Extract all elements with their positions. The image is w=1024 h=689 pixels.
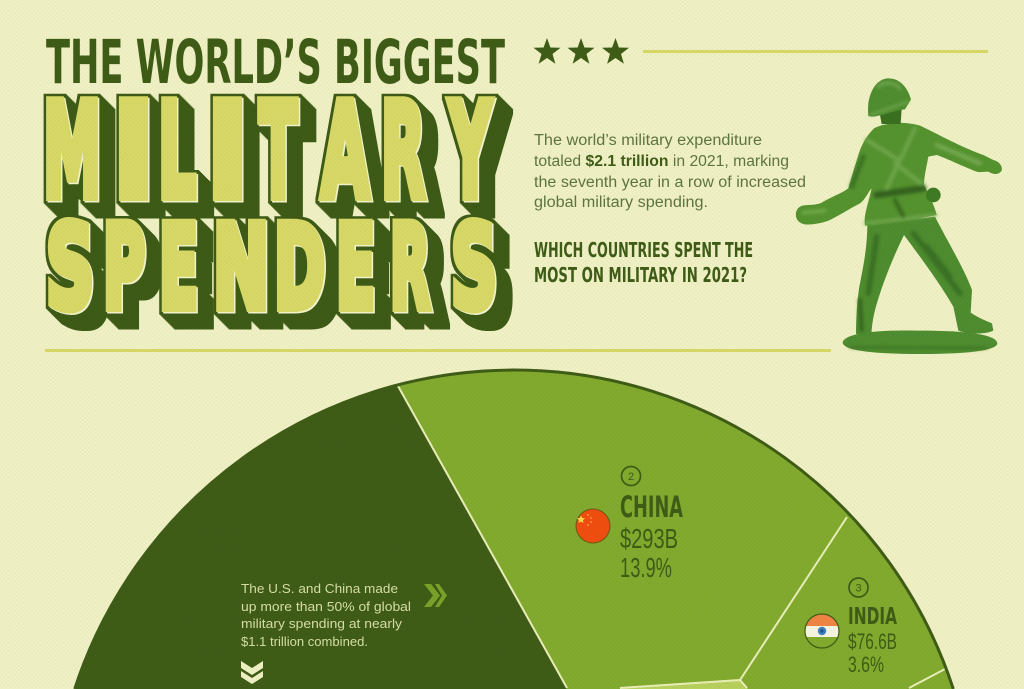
india share: 3.6% [848,652,884,677]
intro text block: the seventh year in a row of increased [534,174,806,191]
soldier legs [856,217,993,335]
callout text: The U.S. and China made [241,581,398,596]
question heading: WHICH COUNTRIES SPENT THE [534,238,753,262]
arrow: chevrons down [241,661,263,684]
soldier shading [803,83,987,348]
intro text block: global military spending. [534,194,708,211]
title word: spenders: D [274,201,325,334]
rank badge: 2: 2 [628,471,634,483]
intro text block [534,132,806,211]
callout text: $1.1 trillion combined. [241,634,368,649]
callout text: up more than 50% of global [241,599,411,614]
title word: spenders: P [103,201,145,334]
title: the world's biggest: THE WORLD’S BIGGEST [46,27,505,98]
title word: spenders: E [159,201,198,334]
soldier neck [880,108,902,124]
china name: CHINA [620,490,683,524]
pie chart [60,370,953,689]
title word: spenders: N [213,201,269,334]
slice: remaining countries [75,370,953,689]
intro text block: The world’s military expenditure [534,132,762,149]
soldier base [843,330,997,354]
title: military spenders [43,75,497,334]
india spending: $76.6B [848,629,897,654]
soldier torso and arms [796,123,1002,226]
title word: military: A [321,75,369,227]
rank badge: 3: 3 [855,582,862,594]
title word: spenders: S [46,201,94,334]
china spending: $293B [620,523,678,554]
china label [620,466,683,583]
title word: spenders: S [451,201,497,334]
arrow: chevrons right [424,584,447,607]
title word: military: T [259,75,297,227]
pie outline [75,370,953,689]
india label [848,578,897,677]
icon: china flag [576,509,610,543]
title word: military: M [43,75,101,227]
slice: united states [60,370,567,689]
title word: spenders: R [390,201,430,334]
title word: military: I [207,75,248,227]
question heading [534,238,753,287]
slice: next country [623,681,748,689]
china share: 13.9% [620,552,672,583]
question heading: MOST ON MILITARY IN 2021? [534,263,747,287]
callout text: military spending at nearly [241,616,403,631]
icon: three stars [534,38,629,64]
india name: INDIA [848,604,897,630]
slice dividers [398,386,945,688]
title word: spenders: E [336,201,375,334]
callout text [241,581,411,649]
title word: military: I [113,75,154,227]
icon: india flag [805,614,839,648]
title word: military: L [158,75,196,227]
intro text block: totaled $2.1 trillion in 2021, marking [534,153,789,170]
title word: military: R [381,75,425,227]
image: toy soldier [796,78,1002,354]
title: military spenders: Y [448,75,492,227]
soldier helmet [868,78,911,117]
soldier pouch [926,188,941,202]
